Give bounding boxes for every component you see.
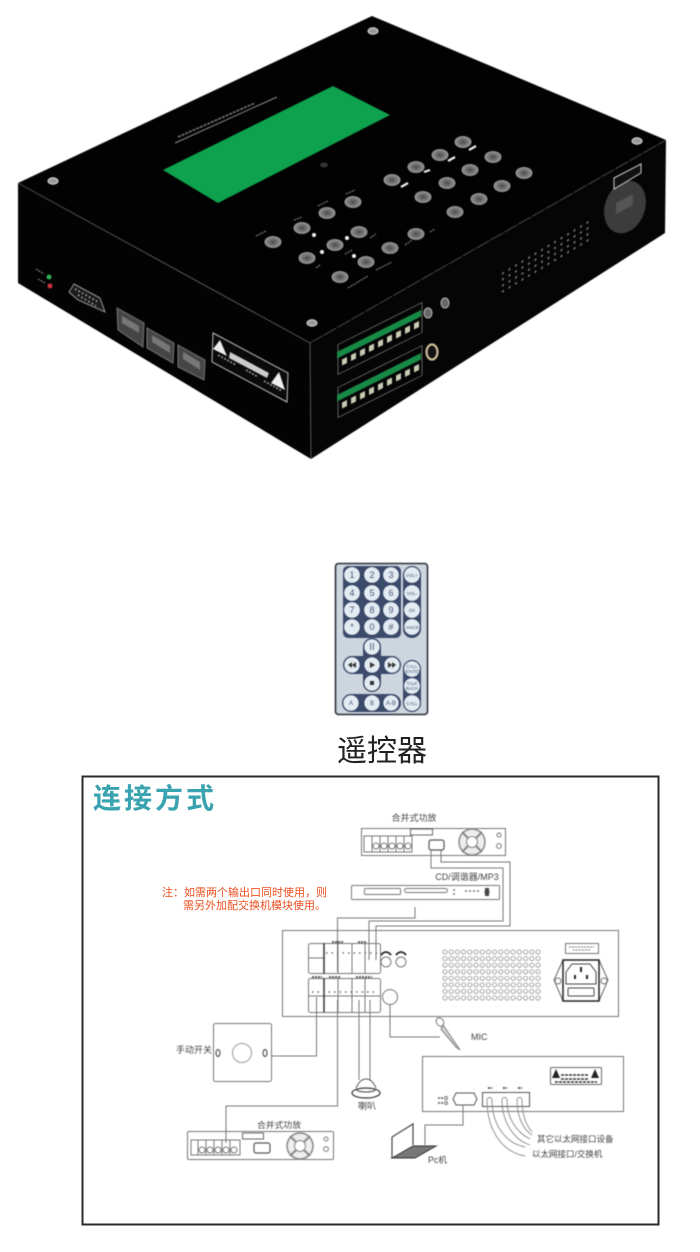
numeric keys: 8 [369, 605, 375, 615]
mic socket [382, 990, 398, 1004]
serial port [453, 1093, 477, 1105]
device front face [18, 183, 311, 459]
numeric keypad buttons [384, 136, 532, 218]
warning label [550, 1068, 602, 1084]
network side panel [422, 1056, 624, 1112]
call keys: CALL [406, 701, 418, 706]
mic jack [426, 344, 438, 360]
volume and OK keys: VOL- [407, 591, 418, 596]
numeric keys: 3 [388, 570, 394, 580]
callout: note: 注：如需两个输出口同时使用，则 [162, 885, 327, 899]
terminal block upper [337, 302, 422, 375]
call keys: CENTER [403, 669, 422, 674]
playback d-pad: Ⅱ [367, 642, 377, 652]
terminal block lower [337, 346, 422, 418]
CD wire to main unit [338, 907, 415, 972]
lower terminal block [308, 978, 380, 1012]
numeric keys: 2 [369, 570, 375, 580]
playback d-pad [343, 638, 401, 692]
numeric key panel [343, 566, 401, 638]
indicator dot [320, 162, 328, 168]
remote body [336, 564, 428, 714]
numeric keys: 4 [349, 588, 355, 598]
manual switch [176, 1024, 272, 1082]
power inlet [554, 960, 608, 1001]
side edge highlight [310, 140, 666, 343]
speaker: 喇叭 [358, 1100, 376, 1111]
microphone [435, 1016, 488, 1050]
A B keys [342, 694, 401, 712]
numeric keys: 7 [349, 605, 355, 615]
RJ45 ports [117, 308, 205, 380]
top amplifier: 合并式功放 [391, 812, 437, 823]
bottom amplifier: 合并式功放 [257, 1119, 301, 1130]
volume and OK keys [403, 566, 422, 638]
DB9 serial port [69, 284, 105, 312]
numeric keys: 1 [349, 570, 355, 580]
wire to manual switch [272, 997, 316, 1056]
top amplifier [362, 812, 506, 856]
green LCD screen [163, 86, 390, 203]
model text strip [175, 97, 277, 143]
numeric keys: 0 [369, 622, 375, 632]
amplifier to main unit wires [369, 850, 510, 960]
knobs [381, 957, 391, 967]
status LEDs [36, 269, 52, 288]
lower block label [312, 976, 372, 978]
function buttons [264, 196, 424, 283]
device edge highlights [18, 183, 311, 459]
corner screws [48, 28, 642, 326]
device top face [18, 16, 666, 343]
volume and OK keys: VOL+ [406, 573, 418, 578]
function button marks [312, 233, 356, 258]
upper terminal block [308, 944, 380, 974]
numeric keys: # [388, 622, 394, 632]
wire to MIC [390, 1004, 440, 1037]
keypad white marks [401, 146, 476, 187]
call keys: BACK [406, 686, 418, 691]
CD tuner MP3 unit [352, 872, 500, 900]
power socket [597, 164, 653, 239]
wire to main amp at bottom [226, 1000, 338, 1143]
manual switch: 手动开关 [176, 1044, 212, 1055]
call keys [403, 660, 422, 712]
numeric keys: 9 [388, 605, 394, 615]
vent grille [442, 949, 541, 1001]
remote control [336, 564, 428, 714]
A B keys: A [349, 701, 353, 707]
A B keys: B [370, 701, 374, 707]
numeric keys: * [350, 622, 354, 632]
status marks [438, 1098, 443, 1103]
A B keys: A-B [386, 701, 396, 707]
main unit rear panel [282, 930, 618, 1016]
volume and OK keys: OK [409, 608, 415, 613]
ethernet cables [487, 1098, 532, 1156]
panel: connection diagram frame [82, 776, 658, 1224]
remote caption: 遥控器 [337, 735, 427, 768]
microphone: MIC [471, 1032, 488, 1042]
numeric keys: 6 [388, 588, 394, 598]
CD tuner MP3 unit: CD/调谐器/MP3 [435, 872, 499, 882]
upper block label [332, 941, 366, 943]
label: other ethernet devices: 其它以太网接口设备 [537, 1134, 614, 1144]
warning label [212, 333, 288, 402]
ventilation grille [500, 217, 592, 297]
ethernet ports [482, 1092, 530, 1106]
function button labels [256, 190, 435, 288]
speaker [352, 1000, 380, 1111]
power rating label [566, 944, 598, 954]
heading: connection method: 连接方式 [93, 783, 217, 814]
device side face [310, 140, 666, 459]
callout: note: 需另外加配交换机模块使用。 [183, 898, 326, 912]
label: ethernet switch: 以太网接口/交换机 [532, 1149, 603, 1159]
callout: note [162, 885, 327, 912]
volume and OK keys: CANCEL [403, 625, 422, 630]
call keys: CALL [406, 664, 418, 669]
laptop [392, 1124, 447, 1165]
numeric keys [344, 567, 399, 635]
connection diagram [176, 812, 624, 1165]
call keys: TALK [407, 681, 417, 686]
RJ45 port inner shading [122, 316, 200, 370]
device: black controller product render [18, 16, 666, 459]
side knobs [424, 298, 449, 318]
serial wire to PC [425, 1105, 463, 1145]
bottom amplifier [188, 1119, 334, 1160]
model text marks [178, 103, 255, 137]
numeric keys: 5 [369, 588, 375, 598]
laptop: Pc机 [428, 1154, 447, 1165]
